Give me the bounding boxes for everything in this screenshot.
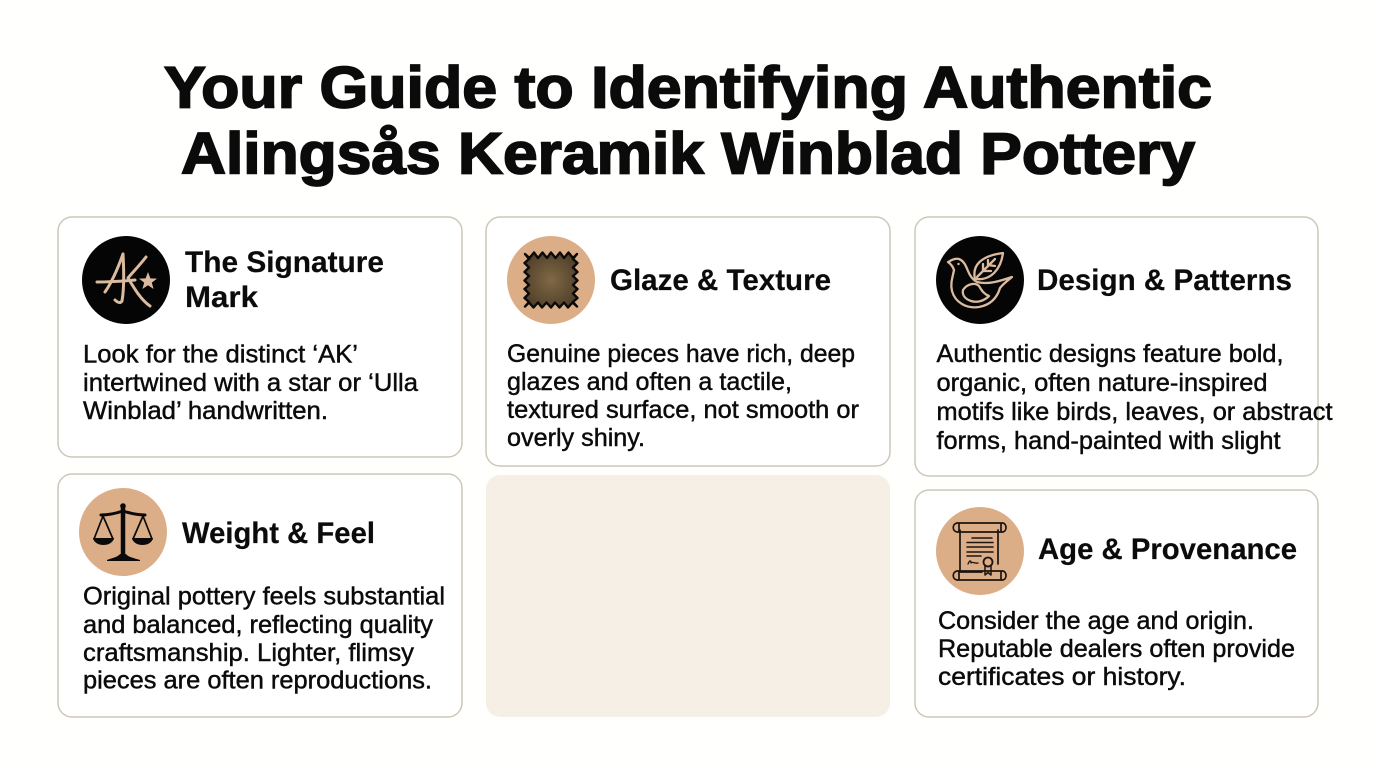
- body text: Reputable dealers often provide: [938, 635, 1295, 663]
- panel: the signature mark: [58, 217, 462, 457]
- heading: The Signature: [185, 246, 384, 279]
- heading: Glaze & Texture: [610, 264, 831, 297]
- body text: Winblad’ handwritten.: [83, 397, 328, 425]
- body text: intertwined with a star or ‘Ulla: [83, 369, 418, 397]
- title: Your Guide to Identifying Authentic: [164, 56, 1212, 120]
- panel: age and provenance: [915, 490, 1318, 717]
- body text: organic, often nature-inspired: [936, 369, 1268, 397]
- body text: [83, 582, 445, 694]
- body text: Consider the age and origin.: [938, 607, 1254, 635]
- body text: forms, hand-painted with slight: [936, 427, 1281, 455]
- panel: weight and feel: [58, 474, 462, 717]
- body text: overly shiny.: [507, 424, 645, 452]
- icon: bird and leaf: [936, 236, 1024, 324]
- icon: textured swatch: [507, 236, 595, 324]
- heading: Design & Patterns: [1037, 264, 1292, 297]
- icon: scroll certificate: [936, 507, 1024, 595]
- body text: Genuine pieces have rich, deep: [507, 340, 855, 368]
- heading: Weight & Feel: [182, 517, 375, 550]
- body text: pieces are often reproductions.: [83, 666, 432, 694]
- body text: Look for the distinct ‘AK’: [83, 340, 358, 368]
- body text: Authentic designs feature bold,: [936, 340, 1284, 368]
- body text: [938, 607, 1295, 691]
- heading: Age & Provenance: [1038, 533, 1297, 566]
- body text: [507, 340, 859, 452]
- panel: design and patterns: [915, 217, 1333, 476]
- heading: [185, 246, 384, 314]
- title: Alingsås Keramik Winblad Pottery: [181, 122, 1195, 186]
- body text: textured surface, not smooth or: [507, 396, 859, 424]
- body text: [83, 340, 418, 425]
- title: [164, 56, 1212, 186]
- panel: glaze and texture: [486, 217, 890, 466]
- heading: Mark: [185, 281, 258, 314]
- icon: balance scales: [79, 488, 167, 576]
- body text: and balanced, reflecting quality: [83, 611, 433, 639]
- body text: glazes and often a tactile,: [507, 368, 792, 396]
- body text: motifs like birds, leaves, or abstract: [936, 398, 1333, 426]
- panel: empty beige placeholder: [486, 475, 890, 717]
- body text: certificates or history.: [938, 663, 1186, 691]
- body text: craftsmanship. Lighter, flimsy: [83, 639, 415, 667]
- icon: AK monogram with star: [82, 236, 170, 324]
- body text: Original pottery feels substantial: [83, 582, 445, 610]
- body text: [936, 340, 1333, 455]
